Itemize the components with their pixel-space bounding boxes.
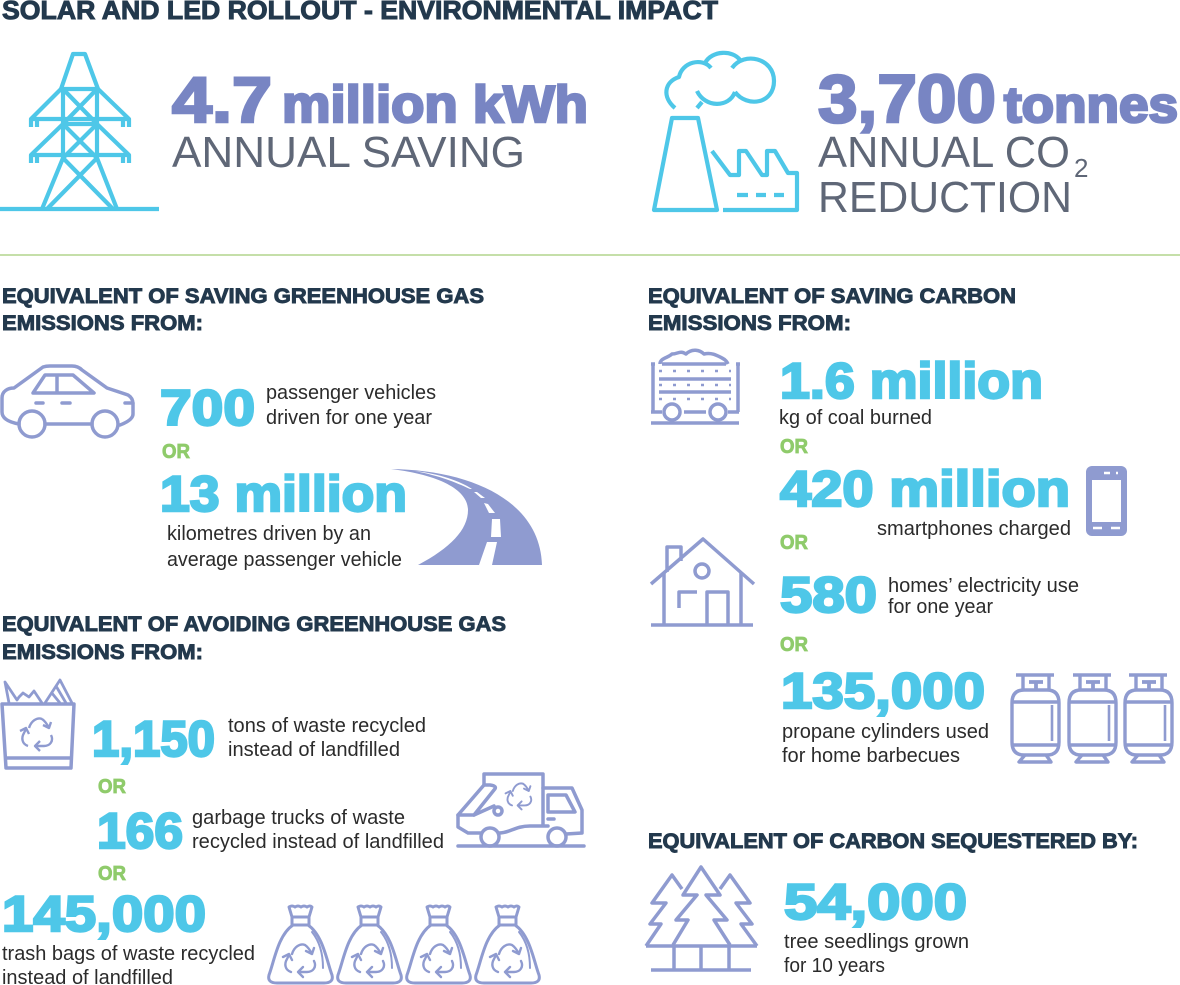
text: homes (888, 575, 1079, 618)
stat: 4.7 million kWh (172, 64, 588, 136)
text: garbage trucks: recycled instead of landfilled (192, 831, 444, 853)
stat: 420 million: 420 million (780, 461, 1070, 517)
icon: trees (646, 867, 757, 970)
label: annual saving: ANNUAL SAVING (172, 128, 525, 177)
heading (2, 285, 484, 335)
text: passenger vehicles: driven for one year (266, 407, 432, 429)
text: tons of waste: tons of waste recycled (228, 715, 426, 737)
stat: 3,700 tonnes: tonnes (1004, 77, 1178, 133)
label: annual CO2 reduction: ANNUAL CO (818, 128, 1070, 177)
text: tree seedlings: tree seedlings grown (784, 931, 969, 953)
heading (648, 285, 1016, 335)
heading: EQUIVALENT OF AVOIDING GREENHOUSE GAS (2, 613, 506, 636)
or: OR (780, 436, 809, 458)
text: propane: propane cylinders used (782, 721, 989, 743)
heading: EQUIVALENT OF SAVING GREENHOUSE GAS (2, 285, 484, 308)
panel: avoiding greenhouse gas emissions (2, 613, 584, 985)
heading (2, 613, 506, 664)
icon: road (391, 469, 542, 565)
text: kilometres driven (167, 523, 402, 571)
text: tree seedlings: for 10 years (784, 955, 885, 977)
icon: garbage truck (458, 774, 584, 846)
stat: 145,000: 145,000 (2, 886, 206, 942)
text: homes: homes’ electricity use (888, 575, 1079, 597)
text: tons of waste: instead of landfilled (228, 739, 400, 761)
text: smartphones: smartphones charged (877, 518, 1071, 540)
stat: 580: 580 (780, 567, 877, 623)
icon: four trash bags (269, 906, 539, 983)
panel: saving greenhouse gas emissions (2, 285, 542, 571)
label: annual CO2 reduction (818, 128, 1088, 222)
icon: car (2, 366, 133, 437)
icon: coal cart (651, 350, 740, 423)
heading: EQUIVALENT OF CARBON SEQUESTERED BY: (648, 830, 1138, 853)
text: tons of waste (228, 715, 426, 761)
stat: 135,000: 135,000 (781, 663, 985, 719)
icon: power pylon (0, 54, 159, 209)
icon: smartphone (1086, 466, 1127, 536)
icon: recycling bin (2, 680, 74, 768)
stat: 3,700 tonnes (818, 61, 1178, 137)
stat: 1.6 million: 1.6 million (780, 353, 1043, 409)
heading: EQUIVALENT OF SAVING CARBON (648, 285, 1016, 308)
text: kilometres driven: kilometres driven by an (167, 523, 371, 545)
text: homes: for one year (888, 596, 993, 618)
text: propane: for home barbecues (782, 745, 960, 767)
panel: annual CO2 reduction (654, 53, 1178, 222)
text: propane (782, 721, 989, 767)
or: OR (162, 441, 191, 463)
heading: EMISSIONS FROM: (2, 312, 203, 335)
stat: 4.7 million kWh: 4.7 (172, 64, 272, 136)
heading: EMISSIONS FROM: (648, 312, 851, 335)
or: OR (780, 532, 809, 554)
or: OR (98, 776, 127, 798)
label: annual CO2 reduction: 2 (1074, 153, 1088, 183)
text: kilometres driven: average passenger vehicle (167, 549, 402, 571)
text: trash bags (2, 943, 255, 985)
stat: 3,700 tonnes: 3,700 (818, 61, 996, 137)
label: annual CO2 reduction: REDUCTION (818, 173, 1072, 222)
stat: 1,150: 1,150 (92, 711, 215, 767)
panel: carbon sequestered (646, 830, 1138, 977)
stat: 166: 166 (97, 803, 183, 859)
or: OR (98, 863, 127, 885)
icon: three propane cylinders (1012, 675, 1172, 762)
icon: factory and smoke (654, 53, 797, 210)
stat: 13 million: 13 million (160, 466, 407, 522)
panel: saving carbon emissions (648, 285, 1172, 767)
text: passenger vehicles: passenger vehicles (266, 382, 436, 404)
text: garbage trucks: garbage trucks of waste (192, 807, 405, 829)
panel: annual saving (0, 54, 588, 209)
stat: 4.7 million kWh: million kWh (282, 76, 588, 134)
text: garbage trucks (192, 807, 444, 853)
heading: EMISSIONS FROM: (2, 641, 203, 664)
text: passenger vehicles (266, 382, 436, 429)
stat: 54,000: 54,000 (784, 874, 967, 930)
text: kg of coal: kg of coal burned (779, 407, 932, 429)
text: tree seedlings (784, 931, 969, 977)
text: trash bags: trash bags of waste recycled (2, 943, 255, 965)
icon: house (651, 539, 754, 625)
stat: 700: 700 (160, 380, 255, 436)
or: OR (780, 634, 809, 656)
